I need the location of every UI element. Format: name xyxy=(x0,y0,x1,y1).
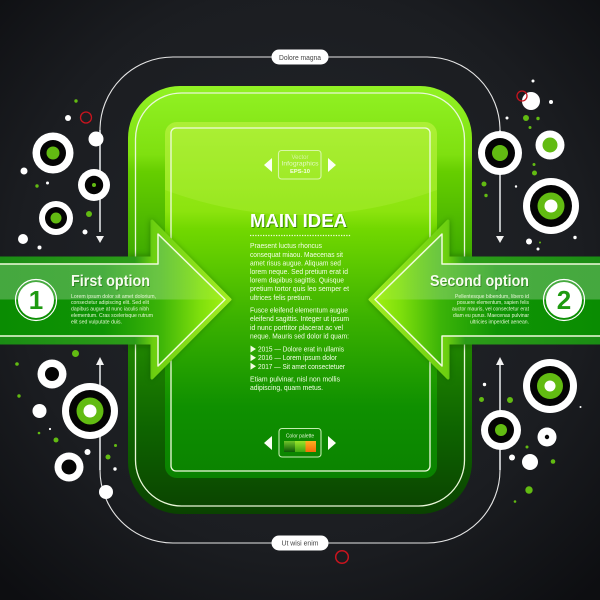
heading: First option: First option xyxy=(71,273,150,290)
panel: inner content card xyxy=(165,122,437,478)
text block: second option: Pellentesque bibendum, libero id xyxy=(455,294,529,300)
arrow: first option xyxy=(0,221,230,378)
text block: main paragraph 1: Praesent luctus rhoncus xyxy=(250,241,322,250)
panel: main outer glass xyxy=(128,86,472,514)
text block: main paragraph 1: consequat miaou. Maecenas sit xyxy=(250,250,343,259)
text block: main paragraph 2: neque. Mauris sed dolor id quam: xyxy=(250,332,349,340)
text block: first option: dapibus augue at nunc iaculis nibh xyxy=(71,307,149,313)
list: years: 2017 — Sit amet consectetuer xyxy=(258,362,346,371)
list: years: 2016 — Lorem ipsum dolor xyxy=(258,353,338,362)
decorative ring: bottom red xyxy=(336,551,348,563)
text block: second option: diam eu purus. Maecenas pulvinar xyxy=(453,313,529,319)
dotted divider xyxy=(250,234,351,236)
decorative circles: bottom left cluster xyxy=(15,350,118,499)
text block: main paragraph 1: pretium tortor quis leo semper et xyxy=(250,284,349,293)
list: years: 2015 — Dolore erat in ullamis xyxy=(258,344,344,354)
arrow: second option xyxy=(370,221,600,378)
bottom badge: Color palette: Color palette xyxy=(286,434,314,440)
text block: first option: Lorem ipsum dolor sit amet dolorium, xyxy=(71,294,156,300)
text block: first option: elit sed vulputate duis. xyxy=(71,320,122,326)
text block: main paragraph 2: eleifend sagittis. Integer ut ipsum xyxy=(250,314,349,323)
text block: main paragraph 1: ultrices felis pretium. xyxy=(250,293,312,302)
label pill: Dolore magna: Dolore magna xyxy=(279,55,321,62)
text block: second option: auctor mauris, vel consectetur erat xyxy=(452,307,530,313)
text block: main paragraph 2: id nunc porttitor placerat ac vel xyxy=(250,323,343,332)
text block: main paragraph 2: Fusce eleifend elementum augue xyxy=(250,306,348,314)
text block: main paragraph 3: adipiscing, quam metus. xyxy=(250,383,323,392)
text block: second option: posuere elementum, sapien felis xyxy=(457,300,529,306)
bottom badge: Color palette xyxy=(264,428,336,457)
text block: main paragraph 1: amet risus augue. Aliquam sed xyxy=(250,258,341,267)
text block: main paragraph 1: lorem dapibus sagittis. Quisque xyxy=(250,276,344,284)
heading: Second option: Second option xyxy=(430,273,529,290)
arrow shadows xyxy=(128,218,472,381)
decorative circles: top left cluster xyxy=(18,99,110,250)
connector: bottom frame line with arrows xyxy=(96,357,504,543)
top badge: Vector Infographics EPS-10: EPS-10 xyxy=(290,169,310,175)
text block: main paragraph 2 xyxy=(250,306,349,340)
top badge: Vector Infographics EPS-10 xyxy=(264,150,336,179)
number badge 2 xyxy=(544,280,584,320)
top badge: Vector Infographics EPS-10: Vector xyxy=(291,155,309,161)
text block: main paragraph 1 xyxy=(250,241,349,302)
list: years xyxy=(250,344,346,371)
text block: main paragraph 3 xyxy=(250,374,340,392)
text block: main paragraph 3: Etiam pulvinar, nisl non mollis xyxy=(250,374,340,384)
heading: First option: First option xyxy=(72,274,151,291)
heading: MAIN IDEA: MAIN IDEA xyxy=(251,212,348,232)
text block: first option: elementum. Cras scelerisque rutrum xyxy=(71,313,153,319)
text block: first option xyxy=(71,294,156,326)
text block: first option: consectetur adipiscing elit. Sed elit xyxy=(71,300,150,306)
decorative circles: bottom right cluster xyxy=(479,359,582,503)
connector: top frame line with arrows xyxy=(96,57,504,243)
label pill: Dolore magna xyxy=(272,50,328,64)
text block: main paragraph 1: lorem neque. Sed pretium erat id xyxy=(250,267,348,276)
top badge: Vector Infographics EPS-10: Infographics xyxy=(282,160,318,168)
text block: second option xyxy=(452,294,530,326)
decorative circles: top right cluster xyxy=(478,80,579,250)
number badge 2: 2 xyxy=(557,285,571,315)
heading: MAIN IDEA: MAIN IDEA xyxy=(250,211,347,231)
heading: Second option: Second option xyxy=(431,274,530,291)
text block: second option: ultricies imperdiet aenean. xyxy=(470,320,529,326)
label pill: Ut wisi enim xyxy=(272,536,328,550)
number badge 1: 1 xyxy=(29,285,43,315)
number badge 1 xyxy=(16,280,56,320)
label pill: Ut wisi enim: Ut wisi enim xyxy=(282,540,319,548)
